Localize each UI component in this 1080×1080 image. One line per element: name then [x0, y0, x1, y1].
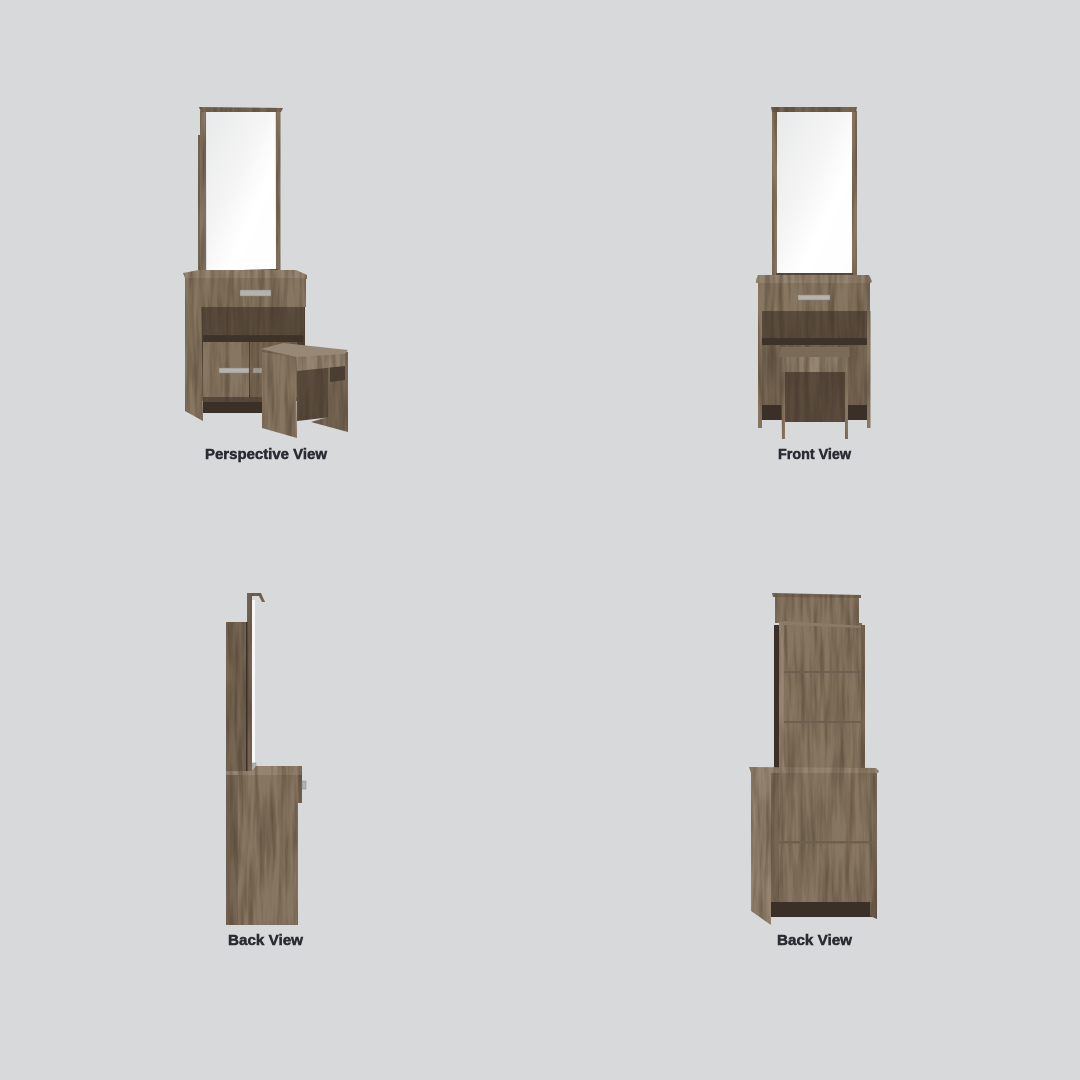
perspective: door handles: [219, 368, 262, 373]
front: cabinet: [756, 275, 872, 428]
side: drawer handle: [302, 781, 306, 789]
label: perspective view: Perspective View: [205, 447, 328, 463]
perspective: cabinet doors: [203, 342, 297, 402]
side: mirror: [247, 593, 265, 771]
label: side view: Back View: [228, 933, 304, 949]
side: cabinet: [226, 766, 306, 925]
front: mirror: [771, 107, 857, 277]
perspective: cabinet: [183, 270, 307, 421]
front: stool: [779, 347, 850, 439]
panel: perspective view: [183, 107, 348, 438]
panel: side view: [226, 593, 306, 925]
panel: front view: [756, 107, 872, 439]
back: mirror rear panel: [774, 621, 865, 770]
back: cabinet: [749, 767, 879, 925]
label: front view: Front View: [778, 447, 852, 463]
panel: back view: [749, 593, 879, 925]
side: back panel: [226, 622, 248, 772]
front: drawer handle: [798, 295, 830, 300]
perspective: stool: [261, 343, 348, 438]
perspective: mirror: [198, 107, 283, 275]
label: back view: Back View: [777, 933, 853, 949]
perspective: drawer handle: [240, 290, 271, 296]
back: mirror board: [772, 593, 861, 623]
